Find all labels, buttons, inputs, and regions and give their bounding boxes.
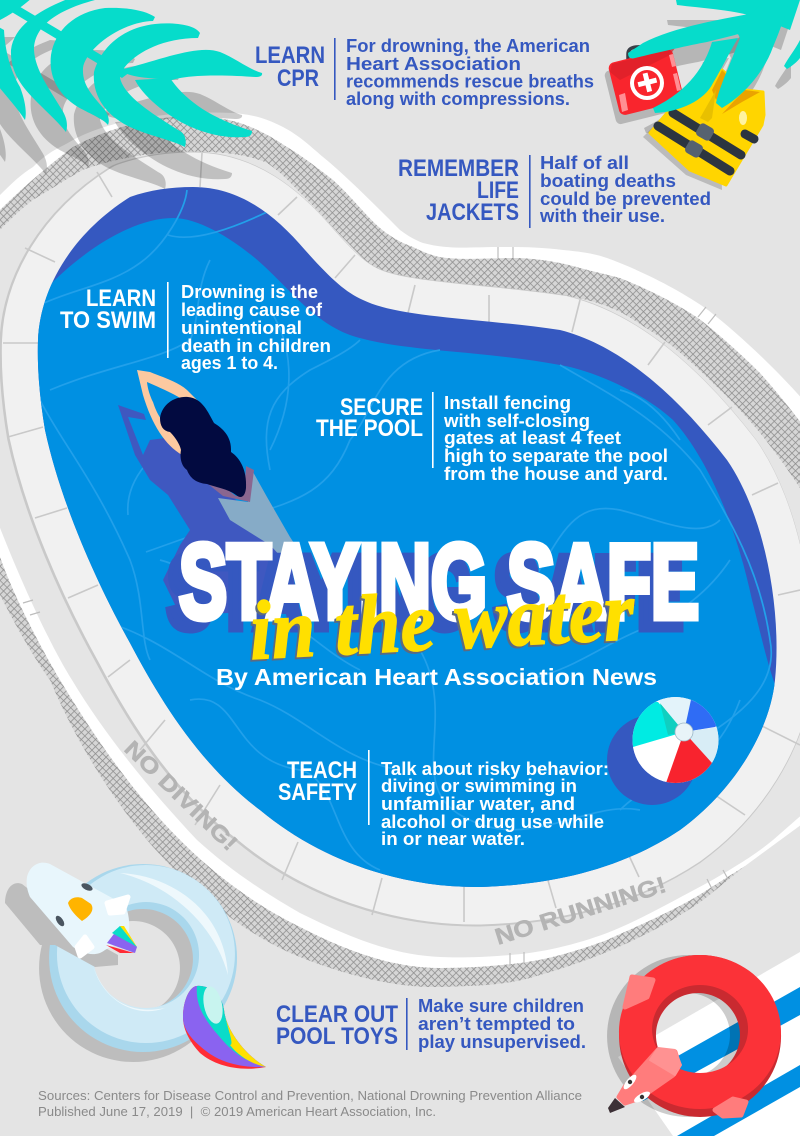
ball shadow [607,715,697,805]
rainbow tail [183,985,266,1069]
heading: SECURE [340,394,423,421]
flamingo neck highlight [650,1048,681,1075]
swimming pool [0,112,800,1000]
swimsuit [208,466,254,502]
body text [539,153,711,226]
jacket shadow [643,75,722,190]
jacket orange shade [712,70,760,114]
jacket dark fold [700,90,716,122]
heading: LEARN [86,285,156,312]
jacket straps [658,113,754,171]
body text: could be prevented [540,189,711,209]
body text: Make sure children [418,996,584,1016]
float shadow [607,955,769,1117]
body text: death in children [181,336,331,356]
icon: beach ball [607,697,718,805]
footer sources: Published June 17, 2019 | © 2019 American Heart Association, Inc. [38,1104,436,1119]
body text: from the house and yard. [444,464,668,484]
heading: TO SWIM [60,307,156,334]
body text [381,759,609,849]
ball body [632,697,718,783]
flamingo fins [625,977,653,1007]
heading [60,285,156,334]
ball panels [632,697,718,783]
swimmer shadow [118,405,300,615]
swimmer legs [218,472,316,590]
head [27,863,129,954]
section: secure the pool [316,392,668,484]
section: remember life jackets [398,153,711,228]
body text: along with compressions. [346,89,570,109]
heading: THE POOL [316,415,423,442]
pool rule: no running: NO RUNNING! [492,871,669,950]
swimmer arms [137,370,201,455]
body text: high to separate the pool [444,446,668,466]
body text: gates at least 4 feet [444,428,621,448]
white edge ticks [23,247,728,966]
body text: in or near water. [381,829,525,849]
heading [276,1001,398,1050]
divider [529,155,531,228]
swimmer hair [160,397,246,497]
body text: For drowning, the American [346,36,590,56]
palm leaf top left [0,0,262,147]
float body [49,864,237,1052]
icon: swimmer [118,370,316,615]
heading [398,155,519,226]
body text: Heart Association [346,54,521,74]
icon: first aid kit [604,46,685,125]
footer sources: Sources: Centers for Disease Control and Prevention, National Drowning Prevention Alliance [38,1088,582,1103]
pool water surface [38,190,774,887]
palm leaf top left shadow [0,37,242,189]
section: teach safety [278,750,609,849]
heading: CLEAR OUT [276,1001,398,1028]
water caustics [40,190,771,870]
body text: with self-closing [443,411,590,431]
body text: alcohol or drug use while [381,812,604,832]
body text: Talk about risky behavior: [381,759,609,779]
section: learn to swim [60,282,331,373]
icon: swan pool float [5,863,266,1069]
heading: TEACH [287,757,357,784]
head shadow [5,883,118,967]
heading: LEARN [255,42,325,69]
heading: JACKETS [426,199,519,226]
body text: play unsupervised. [418,1032,586,1052]
divider [368,750,370,825]
wings [107,897,128,913]
heading [278,757,357,806]
body text [346,36,594,109]
icon: flamingo pool float [607,955,781,1117]
heading: CPR [277,65,319,92]
eyes [80,882,94,892]
body text: unintentional [181,318,302,338]
coping grey line [37,189,776,889]
pool water deep edge [38,187,777,887]
body text: Install fencing [444,393,571,413]
body text: boating deaths [540,171,676,191]
body text: with their use. [539,206,665,226]
body text: aren’t tempted to [418,1014,575,1034]
byline: By American Heart Association News [216,664,657,690]
kit body [607,48,685,116]
jacket highlight [739,111,747,125]
body text: diving or swimming in [381,776,577,796]
section: learn cpr [255,36,594,109]
palm leaf top right shadow [619,20,791,133]
kit handle [628,46,654,60]
pool lower mesh band [0,500,745,987]
body text: unfamiliar water, and [381,794,575,814]
section: clear out pool toys [276,996,586,1052]
icon: life jacket [643,70,764,190]
body text: leading cause of [181,300,323,320]
kit shade [610,48,675,80]
pool rule: no diving: NO DIVING! [120,736,243,856]
body text [181,282,331,373]
jacket buckles [695,122,715,142]
float shadow [39,874,227,1062]
divider [432,392,434,468]
body text [418,996,586,1052]
divider [167,282,169,358]
divider [406,998,408,1050]
kit highlights [619,54,681,112]
body text: Drowning is the [181,282,318,302]
float top surface [57,865,235,1043]
pool white edge [0,112,800,968]
ball hub [675,723,693,741]
towel with stripes [618,952,800,1136]
title script: in the water [247,565,638,678]
flamingo head [619,1050,679,1103]
float sheen [93,873,228,1011]
palm leaf top right [628,0,800,113]
kit shadow [604,55,683,125]
float dark ring [619,955,781,1117]
kit emblem [630,66,664,100]
body text: Half of all [540,153,629,173]
heading: SAFETY [278,779,357,806]
heading: LIFE [477,177,519,204]
divider [334,38,336,100]
body text: ages 1 to 4. [181,353,278,373]
pool upper mesh band [0,116,800,496]
beak [68,897,92,921]
tile joints [3,153,800,922]
heading: REMEMBER [398,155,519,182]
heading: POOL TOYS [276,1023,398,1050]
body text: recommends rescue breaths [346,72,594,92]
body text [443,393,668,484]
heading [316,394,423,442]
pool grey deck [0,152,800,957]
float body [619,955,781,1109]
jacket body [650,70,764,185]
horn [106,926,137,953]
title script shadow: in the water [245,567,636,680]
coping tiles [38,188,777,889]
flamingo beak [608,1098,625,1113]
heading [255,42,325,92]
footer sources [38,1088,582,1119]
title [166,523,699,690]
flamingo eyes [622,1073,638,1091]
